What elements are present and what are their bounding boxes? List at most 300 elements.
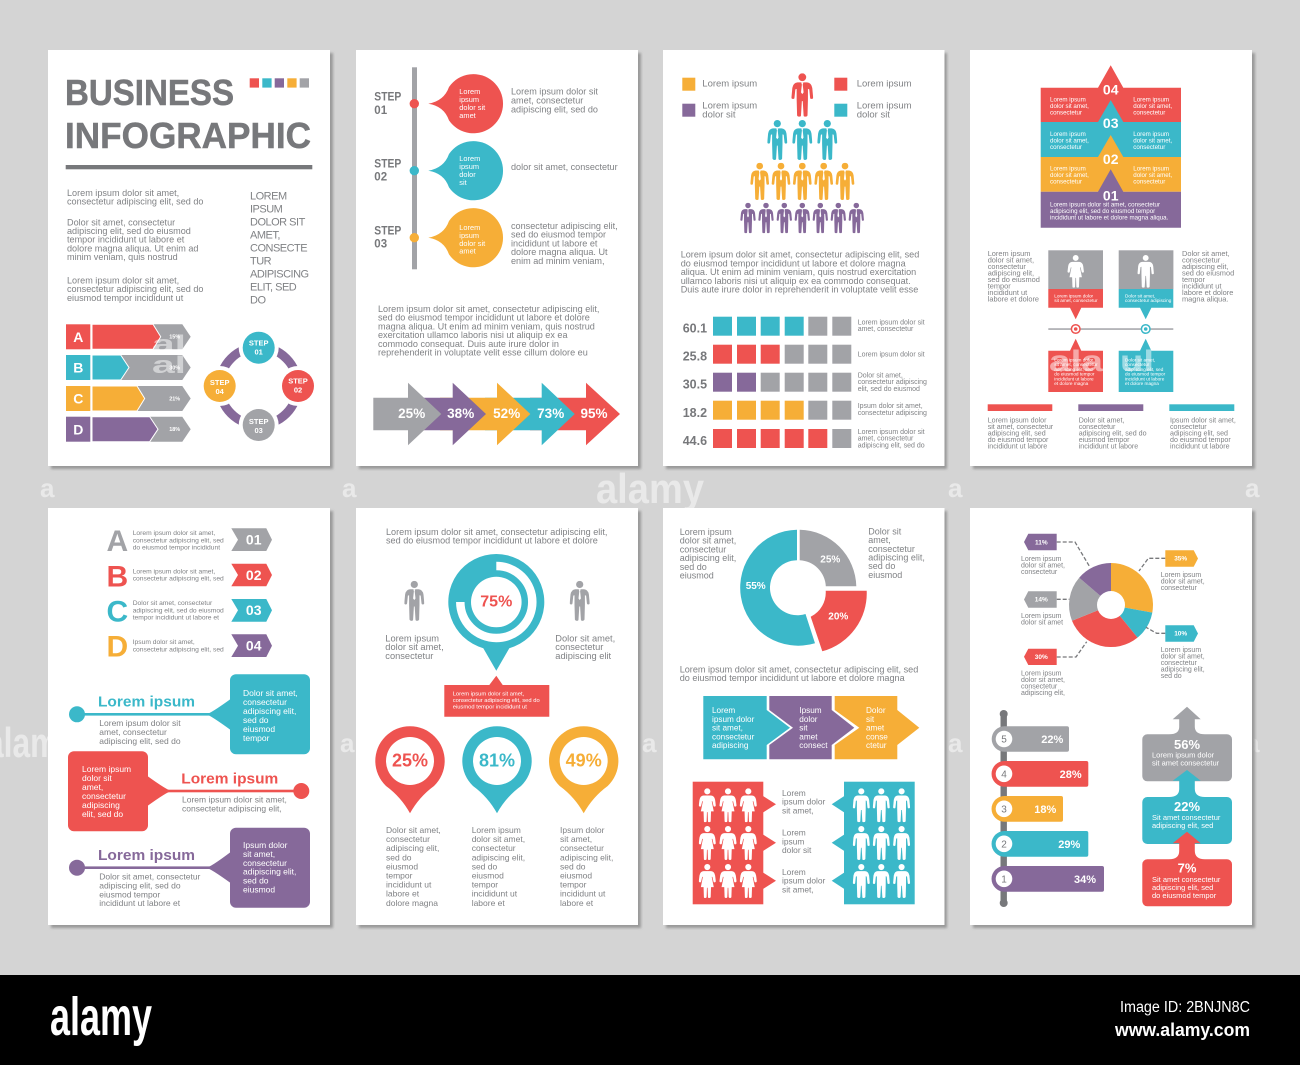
process chevrons: sit xyxy=(866,715,875,724)
legend: Lorem ipsum xyxy=(702,79,757,90)
callout: red: elit, sed do xyxy=(82,809,123,819)
process chevrons: amet xyxy=(799,732,818,741)
intro text: sed do eiusmod tempor incididunt ut labore et dolore xyxy=(386,536,598,546)
profile cards: Lorem ipsum dolor xyxy=(1054,293,1094,298)
stacked arrow boxes: 22% xyxy=(1174,799,1200,814)
pin captions xyxy=(386,825,613,908)
uppercase text column: DOLOR SIT xyxy=(250,216,306,228)
lettered list: B xyxy=(106,561,128,594)
donut text right: sed do xyxy=(868,561,895,571)
stacked pyramid chart xyxy=(1041,65,1181,228)
profile text left: dolor sit amet, xyxy=(988,256,1034,264)
uppercase text column: DO xyxy=(250,294,266,306)
paragraph: exercitation ullamco laboris nisi ut aliquip ex ea xyxy=(378,330,568,340)
waffle chart: Lorem ipsum dolor sit xyxy=(858,319,925,326)
donut text right: amet, xyxy=(868,535,891,545)
pin captions: dolore magna xyxy=(386,898,438,908)
lower callouts xyxy=(1048,339,1173,392)
donut text left: eiusmod xyxy=(680,570,714,580)
colour swatches xyxy=(250,78,309,88)
cycle diagram: steps 01-04: 03 xyxy=(255,426,263,435)
infographic sheet: a xyxy=(1245,728,1260,758)
profile text right: sed do eiusmod xyxy=(1182,268,1234,278)
cycle diagram: steps 01-04 xyxy=(200,328,318,445)
callout: red: dolor sit xyxy=(82,773,112,783)
lettered list: 03 xyxy=(246,602,262,618)
pie captions xyxy=(1021,556,1205,697)
lower callouts: ala xyxy=(1049,345,1103,378)
uppercase text column: IPSUM xyxy=(250,204,283,216)
donut text left: consectetur xyxy=(680,544,726,554)
uppercase text column: AMET, xyxy=(250,230,280,242)
body text column: minim veniam, quis nostrud xyxy=(67,252,178,262)
timeline with markers xyxy=(1048,325,1173,333)
numbered bar chart: 18% xyxy=(1034,804,1057,816)
bar chart: A B C D: A xyxy=(73,329,83,345)
lower callouts: et dolore magna xyxy=(1054,381,1089,386)
lower callouts: Lorem ipsum dolor xyxy=(1054,357,1094,362)
stacked arrow boxes: do eiusmod tempor xyxy=(1152,891,1217,900)
stacked pyramid chart: dolor sit amet, xyxy=(1050,172,1089,179)
profile cards: sit amet, consectetur xyxy=(1054,298,1098,303)
callout: red: adipiscing xyxy=(82,800,120,810)
profile text left: Lorem ipsum xyxy=(988,249,1030,258)
infographic sheet: a xyxy=(342,473,357,503)
stacked pyramid chart: 03 xyxy=(1103,115,1119,131)
waffle chart xyxy=(683,317,927,449)
profile text right: tempor xyxy=(1182,275,1206,284)
callout: purple: adipiscing elit, xyxy=(243,867,296,877)
bottom columns: adipiscing elit, sed xyxy=(1170,430,1228,438)
step 03: sed do eiusmod tempor xyxy=(511,230,606,240)
body text column: Lorem ipsum dolor sit amet, xyxy=(67,276,179,286)
step 02: dolor sit amet, consectetur xyxy=(511,162,618,172)
paragraph: Lorem ipsum dolor sit amet, consectetur adipiscing elit, xyxy=(378,304,599,314)
step 01: adipiscing elit, sed do xyxy=(511,104,598,114)
legend: Lorem ipsum xyxy=(857,100,912,111)
waffle chart: amet, consectetur xyxy=(858,326,914,333)
body text column: dolore magna aliqua. Ut enim ad xyxy=(67,243,198,253)
pie captions: dolor sit amet, xyxy=(1021,677,1065,684)
pin captions: labore et xyxy=(472,898,505,908)
right person text: adipiscing elit xyxy=(555,651,612,661)
stacked pyramid chart: Lorem ipsum xyxy=(1133,131,1169,138)
stacked arrow boxes: sit amet consectetur xyxy=(1152,758,1220,767)
blocks text: Lorem xyxy=(782,828,806,838)
pin captions: consectetur xyxy=(560,843,604,853)
footer bar: www.alamy.com xyxy=(1114,1020,1250,1040)
step 01: ipsum xyxy=(459,95,479,104)
profile text right: Dolor sit amet, xyxy=(1182,249,1230,258)
waffle chart: elit, sed do eiusmod xyxy=(858,386,920,393)
step 03: enim ad minim veniam, xyxy=(511,256,604,266)
donut text left: Lorem ipsum xyxy=(680,527,732,537)
pie captions: Lorem ipsum xyxy=(1021,613,1062,620)
left person text: dolor sit amet, xyxy=(385,642,444,652)
bottom columns: Lorem ipsum dolor xyxy=(988,417,1047,425)
stacked pyramid chart: Lorem ipsum xyxy=(1133,166,1169,173)
legend: dolor sit xyxy=(857,109,890,120)
lower callouts: incididunt ut labore xyxy=(1054,376,1094,381)
body text column: adipiscing elit, sed do eiusmod xyxy=(67,226,191,236)
body text column: eiusmod tempor incididunt ut xyxy=(67,293,184,303)
lettered list: C xyxy=(106,596,128,629)
lettered list: tempor incididunt ut labore et xyxy=(133,615,219,622)
bottom columns: Ipsum dolor sit amet, xyxy=(1170,417,1236,425)
red caption box xyxy=(444,676,549,717)
process chevrons: Ipsum xyxy=(799,706,822,715)
left person text: Lorem ipsum xyxy=(385,633,439,643)
waffle chart: 60.1 xyxy=(683,321,707,335)
arrow sequence chart: 52% xyxy=(493,406,520,421)
lettered list: 01 xyxy=(246,532,262,548)
process chevrons: Dolor xyxy=(866,706,886,715)
profile cards: Dolor sit amet, xyxy=(1125,293,1155,298)
bottom columns: sit amet, consectetur xyxy=(988,423,1054,431)
lower callouts: Dolor sit amet, xyxy=(1125,357,1155,362)
process chevrons: ctetur xyxy=(866,741,887,750)
donut chart: 20% xyxy=(828,612,848,623)
step 01: dolor sit xyxy=(459,103,485,112)
pie captions: dolor sit amet, xyxy=(1161,578,1205,586)
waffle chart: 44.6 xyxy=(683,434,707,448)
stacked pyramid chart: consectetur xyxy=(1133,179,1165,186)
legend xyxy=(682,78,912,120)
arrow sequence chart: 73% xyxy=(537,406,564,421)
pin captions: incididunt ut xyxy=(386,880,432,890)
pin captions: sed do xyxy=(472,861,497,871)
footer bar xyxy=(0,975,1300,1065)
process chevrons: ipsum dolor xyxy=(712,715,755,724)
step 03: 03 xyxy=(374,239,387,251)
bottom columns: consectetur xyxy=(1170,423,1207,431)
body text column xyxy=(67,188,204,303)
panel: location pins xyxy=(356,508,641,928)
big pin 75% xyxy=(448,554,544,671)
callout: teal: Lorem ipsum xyxy=(98,694,195,711)
lower callouts: do eiusmod tempor xyxy=(1125,372,1166,377)
dashed connectors xyxy=(1057,542,1165,657)
bottom columns: consectetur xyxy=(1079,423,1116,431)
intro text: Lorem ipsum dolor sit amet, consectetur adipiscing elit, xyxy=(386,527,607,537)
step 01: amet xyxy=(459,111,476,120)
stacked pyramid chart: consectetur xyxy=(1050,179,1082,186)
bar chart: A B C D: al xyxy=(152,352,186,379)
stacked pyramid chart: incididunt ut labore et dolore magna aliqua. xyxy=(1050,215,1169,222)
step 02 xyxy=(374,141,618,200)
callout: teal: Lorem ipsum dolor sit xyxy=(99,718,181,728)
right person text: consectetur xyxy=(555,642,603,652)
numbered bar chart: 5 xyxy=(1001,735,1007,746)
pie chart xyxy=(1069,563,1153,647)
bottom columns: adipiscing elit, sed do xyxy=(1079,430,1147,438)
bar chart: A B C D: 18% xyxy=(169,427,180,433)
lower callouts: consectetur xyxy=(1125,362,1150,367)
callout: purple: consectetur xyxy=(243,858,287,868)
lower callouts: ul xyxy=(1120,345,1154,378)
title xyxy=(65,72,311,156)
callout: red: Lorem ipsum xyxy=(82,764,131,774)
pin 49% xyxy=(549,726,618,813)
bottom columns xyxy=(988,404,1236,451)
stacked pyramid chart: consectetur xyxy=(1133,109,1165,116)
callout: red: consectetur adipiscing elit, xyxy=(182,804,282,814)
step 01: Lorem ipsum dolor sit xyxy=(511,87,598,97)
pie captions: adipiscing elit, xyxy=(1021,690,1065,697)
pin captions: tempor xyxy=(560,880,587,890)
pin captions: Dolor sit amet, xyxy=(386,825,441,835)
process chevrons: sit amet, xyxy=(712,724,743,733)
pin captions: tempor xyxy=(386,870,413,880)
step 02: sit xyxy=(459,178,467,187)
paragraph: Duis aute irure dolor in reprehenderit in voluptate velit esse xyxy=(681,284,918,294)
numbered bar chart: 2 xyxy=(1001,839,1007,850)
pie captions: consectetur xyxy=(1161,585,1198,592)
lower callouts: incididunt ut labore xyxy=(1125,376,1165,381)
callout: purple: incididunt ut labore et xyxy=(99,898,181,908)
stacked pyramid chart: dolor sit amet, xyxy=(1133,103,1172,110)
waffle chart: Lorem ipsum dolor sit xyxy=(858,351,925,358)
men block xyxy=(832,782,915,904)
paragraph: Lorem ipsum dolor sit amet, consectetur adipiscing elit, sed xyxy=(681,250,919,260)
arrow sequence chart xyxy=(373,383,620,445)
waffle chart: 25.8 xyxy=(683,349,707,363)
women block xyxy=(693,782,776,904)
numbered bar chart: 22% xyxy=(1041,734,1064,746)
pie captions: sed do xyxy=(1161,673,1182,680)
process chevrons: consect xyxy=(799,741,828,750)
pin captions: tempor xyxy=(472,880,498,890)
pie captions: Lorem ipsum xyxy=(1021,671,1062,678)
legend: dolor sit xyxy=(702,109,736,120)
donut text left: adipiscing elit, xyxy=(680,553,736,563)
stacked pyramid chart: 04 xyxy=(1103,82,1119,98)
callout: teal: adipiscing elit, xyxy=(243,706,296,716)
bottom columns: do eiusmod tempor xyxy=(1170,436,1231,444)
pie captions: dolor sit amet, xyxy=(1021,562,1065,570)
pin captions: adipiscing elit, xyxy=(472,852,525,862)
uppercase text column: CONSECTE xyxy=(250,242,307,254)
callout: red: Lorem ipsum xyxy=(181,770,278,787)
middle paragraph: Lorem ipsum dolor sit amet, consectetur adipiscing elit, sed xyxy=(680,664,918,674)
pin captions: sit amet, xyxy=(560,834,592,844)
left person text: consectetur xyxy=(385,651,433,661)
bottom columns: Dolor sit amet, xyxy=(1079,417,1124,425)
step 03: dolor sit xyxy=(459,239,485,248)
title: INFOGRAPHIC xyxy=(65,115,311,156)
infographic sheet: a xyxy=(40,473,55,503)
numbered bar chart: 4 xyxy=(1001,769,1007,780)
infographic sheet: a xyxy=(948,473,963,503)
step 02: STEP xyxy=(374,158,402,170)
infographic sheet: a xyxy=(1245,473,1260,503)
stacked pyramid chart: Lorem ipsum xyxy=(1133,96,1169,103)
callout: purple: adipiscing elit, sed do xyxy=(99,880,181,890)
bar chart: A B C D: 15% xyxy=(169,334,180,340)
stacked arrow boxes: adipiscing elit, sed xyxy=(1152,821,1213,830)
body text column: Dolor sit amet, consectetur xyxy=(67,218,175,228)
stacked pyramid chart: Lorem ipsum xyxy=(1050,96,1086,103)
pie captions: consectetur xyxy=(1021,569,1058,576)
pin captions: dolor sit amet, xyxy=(472,834,525,844)
panel: letters and callouts xyxy=(48,508,333,928)
lettered list: consectetur adipiscing elit, sed xyxy=(133,576,224,583)
paragraph: reprehenderit in voluptate velit esse cillum dolore eu xyxy=(378,348,588,358)
process chevrons: adipiscing xyxy=(712,741,749,750)
panel: people pyramid xyxy=(663,50,947,469)
pin captions: labore et xyxy=(560,898,594,908)
waffle chart: amet, consectetur xyxy=(858,436,914,443)
stacked arrow boxes: Sit amet consectetur xyxy=(1152,875,1221,884)
step 02: Lorem xyxy=(459,154,480,163)
blocks text: ipsum dolor xyxy=(782,797,826,807)
profile text left: sed do eiusmod xyxy=(988,275,1040,284)
profile cards: consectetur adipiscing xyxy=(1125,298,1172,303)
uppercase text column: ELIT, SED xyxy=(250,282,297,294)
callout: red: Lorem ipsum dolor sit amet, xyxy=(182,795,287,805)
donut text right: Dolor sit xyxy=(868,526,902,536)
pin captions: adipiscing elit, xyxy=(560,852,613,862)
step 01: Lorem xyxy=(459,87,480,96)
profile text left: labore et dolore xyxy=(988,294,1039,304)
donut text right: consectetur xyxy=(868,544,915,554)
lettered list: consectetur adipiscing elit, sed xyxy=(133,646,224,653)
uppercase text column: TUR xyxy=(250,256,272,268)
lettered list: Lorem ipsum dolor sit amet, xyxy=(133,568,215,575)
process chevrons: conse xyxy=(866,732,888,741)
step 03: dolore magna aliqua. Ut xyxy=(511,247,608,257)
big pin 75%: 75% xyxy=(480,594,512,611)
donut text left: sed do xyxy=(680,562,707,572)
stacked arrow boxes xyxy=(1142,707,1232,906)
footer bar: Image ID: 2BNJN8C xyxy=(1120,999,1250,1016)
pin captions: eiusmod xyxy=(472,870,504,880)
bar chart: A B C D: 21% xyxy=(169,396,180,402)
callout: teal: sed do xyxy=(243,715,269,725)
blocks text: ipsum dolor xyxy=(782,876,826,886)
numbered bar chart: 29% xyxy=(1058,839,1081,851)
lower callouts: adipiscing elit, sed xyxy=(1125,367,1164,372)
stacked pyramid chart: dolor sit amet, xyxy=(1050,103,1089,110)
pie captions: Lorem ipsum xyxy=(1161,647,1201,654)
waffle chart: 18.2 xyxy=(683,406,707,420)
infographic sheet: a xyxy=(642,728,657,758)
cycle diagram: steps 01-04: STEP xyxy=(249,338,268,348)
panel: business infographic cover xyxy=(48,50,333,469)
process chevrons: amet xyxy=(866,724,885,733)
person right xyxy=(570,581,590,621)
lettered list: Dolor sit amet, consectetur xyxy=(133,600,213,607)
bar chart: A B C D: D xyxy=(73,422,83,438)
callout: teal: tempor xyxy=(243,733,270,743)
profile text left: tempor xyxy=(988,282,1011,290)
process chevrons xyxy=(703,696,919,759)
callout: teal xyxy=(69,674,310,754)
uppercase text column: ADIPISCING xyxy=(250,268,309,280)
stacked arrow boxes: adipiscing elit, sed xyxy=(1152,883,1213,892)
profile text left: incididunt ut xyxy=(988,288,1027,297)
callout: purple xyxy=(69,828,310,908)
red caption box: Lorem ipsum dolor sit amet, xyxy=(453,691,525,697)
pin captions: adipiscing elit, xyxy=(386,843,439,853)
callout: red: amet, xyxy=(82,782,103,792)
lettered list: adipiscing elit, sed do eiusmod xyxy=(133,607,224,614)
pin captions: labore et xyxy=(386,889,420,899)
arrow sequence chart: 38% xyxy=(447,406,474,421)
donut text right: eiusmod xyxy=(868,570,902,580)
paragraph: commodo consequat. Duis aute irure dolor in xyxy=(378,339,559,349)
cycle diagram: steps 01-04: 04 xyxy=(216,387,225,396)
pin captions: sed do xyxy=(560,861,586,871)
body text column: Lorem ipsum dolor sit amet, xyxy=(67,188,179,198)
pin 49%: 49% xyxy=(566,751,602,771)
profile text right: consectetur xyxy=(1182,256,1221,264)
process chevrons: Lorem xyxy=(712,706,735,715)
step 01: 01 xyxy=(374,105,388,117)
stacked arrow boxes: Lorem ipsum dolor xyxy=(1152,750,1215,760)
legend: Lorem ipsum xyxy=(702,100,757,111)
pin captions: consectetur xyxy=(472,843,516,853)
step 02: 02 xyxy=(374,172,387,184)
percent tags: 35% xyxy=(1174,556,1187,563)
title: BUSINESS xyxy=(65,72,234,113)
pin captions: eiusmod xyxy=(386,861,418,871)
cycle diagram: steps 01-04: 01 xyxy=(255,348,263,356)
step 02: dolor xyxy=(459,170,476,179)
percent tags xyxy=(1024,534,1198,665)
step 01 xyxy=(374,74,598,133)
numbered bar chart: 1 xyxy=(1001,874,1007,885)
callout: teal: adipiscing elit, sed do xyxy=(99,736,181,746)
waffle chart: consectetur adipiscing xyxy=(858,379,927,386)
pie captions: Lorem ipsum xyxy=(1021,556,1062,563)
callout: purple: eiusmod xyxy=(243,884,275,894)
lettered list: do eiusmod tempor incididunt xyxy=(133,545,220,552)
step 01: amet, consectetur xyxy=(511,96,583,106)
stacked pyramid chart: 02 xyxy=(1103,151,1119,167)
arrow sequence chart: 25% xyxy=(398,406,425,421)
stacked pyramid chart: dolor sit amet, xyxy=(1133,138,1172,144)
bottom columns: incididunt ut labore xyxy=(988,443,1047,451)
waffle chart: Lorem ipsum dolor sit xyxy=(858,429,925,436)
blocks text: Lorem xyxy=(782,788,806,798)
lettered list: A xyxy=(106,525,128,558)
profile text right: incididunt ut xyxy=(1182,282,1221,290)
bottom columns: adipiscing elit, sed xyxy=(988,430,1046,438)
infographic sheet: alamy xyxy=(596,465,705,512)
bar chart: A B C D: B xyxy=(73,360,83,376)
process chevrons: dolor xyxy=(799,715,818,724)
process chevrons: sit xyxy=(799,724,808,733)
blocks text xyxy=(782,788,826,894)
step 02: ipsum xyxy=(459,162,479,171)
panel: stacked layers and profiles xyxy=(970,50,1255,469)
callout: teal: eiusmod xyxy=(243,724,275,734)
footer bar: alamy xyxy=(50,987,152,1047)
waffle chart: Ipsum dolor sit amet, xyxy=(858,403,923,410)
paragraph: ullamco laboris nisi ut aliquip ex ea commodo consequat. xyxy=(681,276,911,286)
lettered list: D xyxy=(106,630,128,663)
blocks text: dolor sit xyxy=(782,845,812,855)
arrow sequence chart: 95% xyxy=(580,406,608,421)
callout: purple: Dolor sit amet, consectetur xyxy=(99,872,201,882)
cycle diagram: steps 01-04: STEP xyxy=(210,378,229,387)
blocks text: ipsum xyxy=(782,836,804,846)
pin captions: sed do xyxy=(386,852,412,862)
right person text: Dolor sit amet, xyxy=(555,633,615,643)
pin captions: eiusmod xyxy=(560,870,592,880)
pie captions: Lorem ipsum xyxy=(1161,572,1201,579)
